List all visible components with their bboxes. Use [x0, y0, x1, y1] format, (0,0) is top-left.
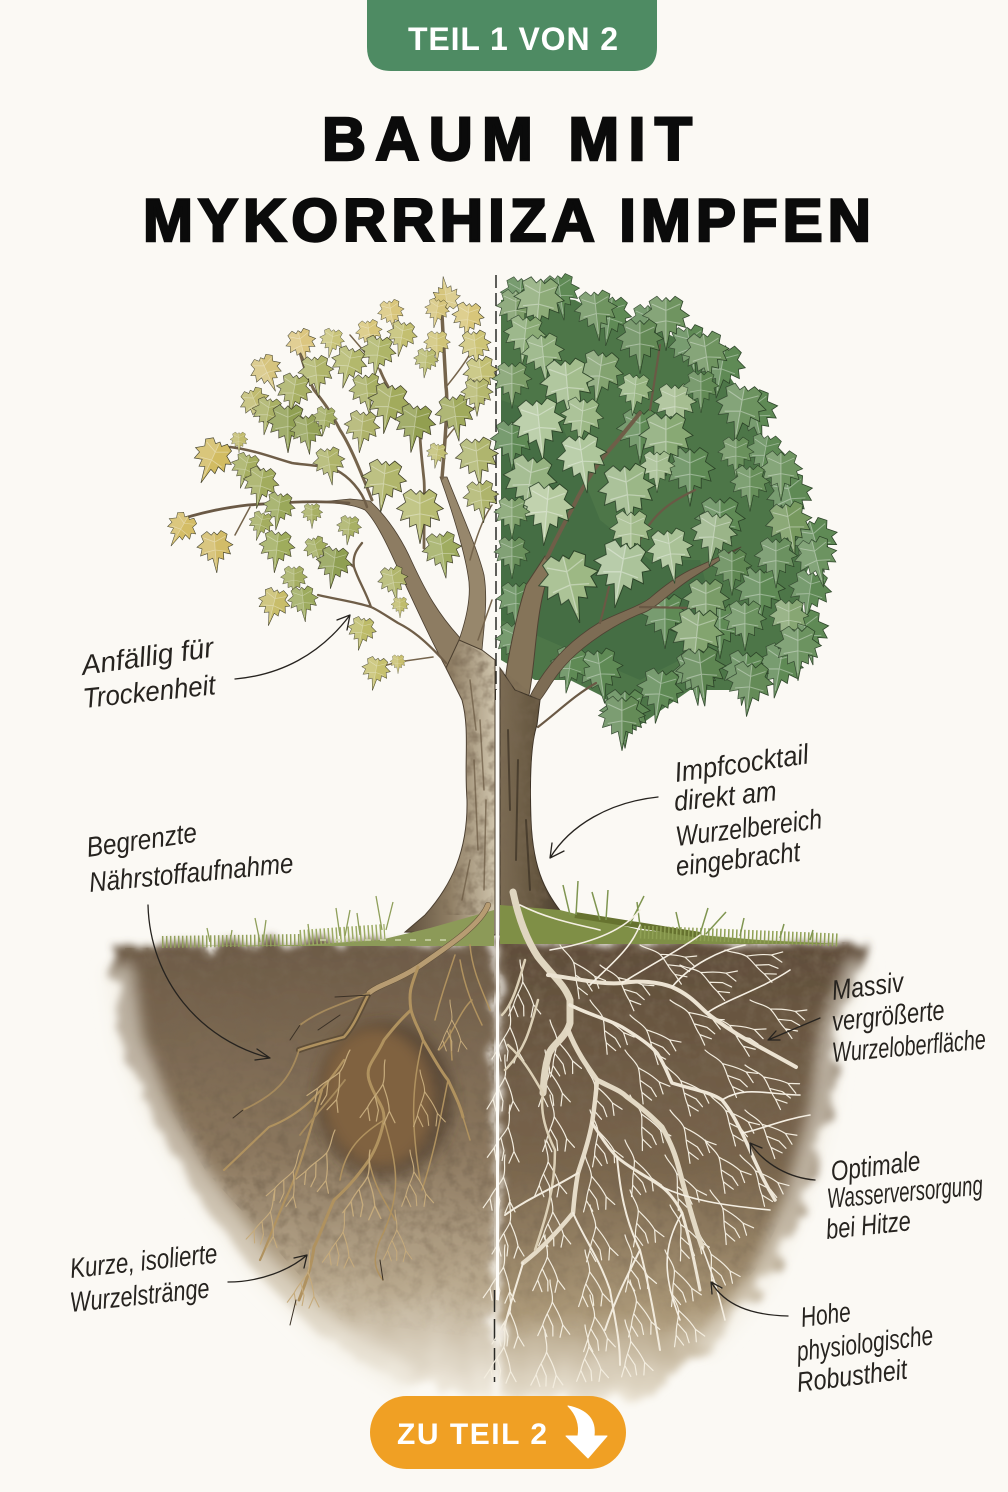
callout: Hohe physiologische Robustheit: Robustheit [795, 1354, 910, 1398]
title [143, 105, 871, 254]
roots: left, with compact root ball [224, 905, 490, 1325]
callout: Optimale Wasserversorgung bei Hitze [750, 1143, 984, 1245]
soil: right half [500, 942, 868, 1400]
callout: Impfcocktail direkt am Wurzelbereich eingebracht [550, 738, 824, 882]
divider line [494, 275, 496, 1382]
trunk: left half [405, 640, 495, 935]
badge: part 1 of 2: TEIL 1 VON 2 [408, 21, 618, 57]
branches: right tree [503, 345, 741, 727]
leaves: left tree [158, 274, 502, 693]
callout: Impfcocktail direkt am Wurzelbereich eingebracht: eingebracht [674, 836, 803, 882]
callout: Massiv vergrößerte Wurzeloberfläche: Massiv [830, 966, 907, 1006]
callout: Kurze, isolierte Wurzelstränge: Wurzelstränge [68, 1273, 211, 1318]
callout: Impfcocktail direkt am Wurzelbereich eingebracht: Wurzelbereich [674, 803, 824, 852]
callout: Optimale Wasserversorgung bei Hitze: Optimale [829, 1145, 922, 1187]
callout: Hohe physiologische Robustheit: Hohe [799, 1296, 852, 1333]
callout: Begrenzte Nährstoffaufnahme [85, 817, 295, 1060]
badge: part 1 of 2 [367, 0, 657, 71]
callout: Impfcocktail direkt am Wurzelbereich eingebracht: Impfcocktail [673, 738, 811, 788]
callout: Massiv vergrößerte Wurzeloberfläche: vergrößerte [830, 994, 946, 1037]
callout: Begrenzte Nährstoffaufnahme: Nährstoffaufnahme [88, 847, 295, 898]
callout: Kurze, isolierte Wurzelstränge [68, 1238, 307, 1318]
soil: left half [112, 942, 494, 1400]
leaves: right tree front layer [492, 275, 845, 751]
callout: Anfällig für Trockenheit [78, 615, 350, 714]
callout: Anfällig für Trockenheit: Anfällig für [78, 631, 217, 681]
title: BAUM MIT [322, 105, 692, 173]
button: to part 2 [370, 1396, 626, 1469]
callout: Impfcocktail direkt am Wurzelbereich eingebracht: direkt am [672, 775, 778, 817]
callout: Optimale Wasserversorgung bei Hitze: bei Hitze [824, 1205, 912, 1245]
callout: Begrenzte Nährstoffaufnahme: Begrenzte [85, 817, 199, 863]
centre line over roots [496, 690, 499, 1300]
ground and grass: left [162, 896, 494, 946]
button: to part 2: ZU TEIL 2 [397, 1418, 547, 1451]
right canopy: dark mass [501, 295, 815, 725]
icon: curved down arrow [566, 1406, 607, 1458]
callout: Anfällig für Trockenheit: Trockenheit [81, 669, 218, 714]
callout: Kurze, isolierte Wurzelstränge: Kurze, isolierte [68, 1238, 219, 1284]
trunk: right half [500, 668, 572, 935]
ground and grass: right [500, 881, 840, 944]
roots: right, dense white network [483, 892, 810, 1389]
callout: Hohe physiologische Robustheit [711, 1282, 935, 1398]
leaves: right tree back layer [490, 272, 847, 748]
branches: left tree [173, 315, 492, 690]
callout: Hohe physiologische Robustheit: physiologische [794, 1319, 935, 1367]
callout: Massiv vergrößerte Wurzeloberfläche [768, 966, 987, 1068]
title: MYKORRHIZA IMPFEN [143, 187, 871, 254]
